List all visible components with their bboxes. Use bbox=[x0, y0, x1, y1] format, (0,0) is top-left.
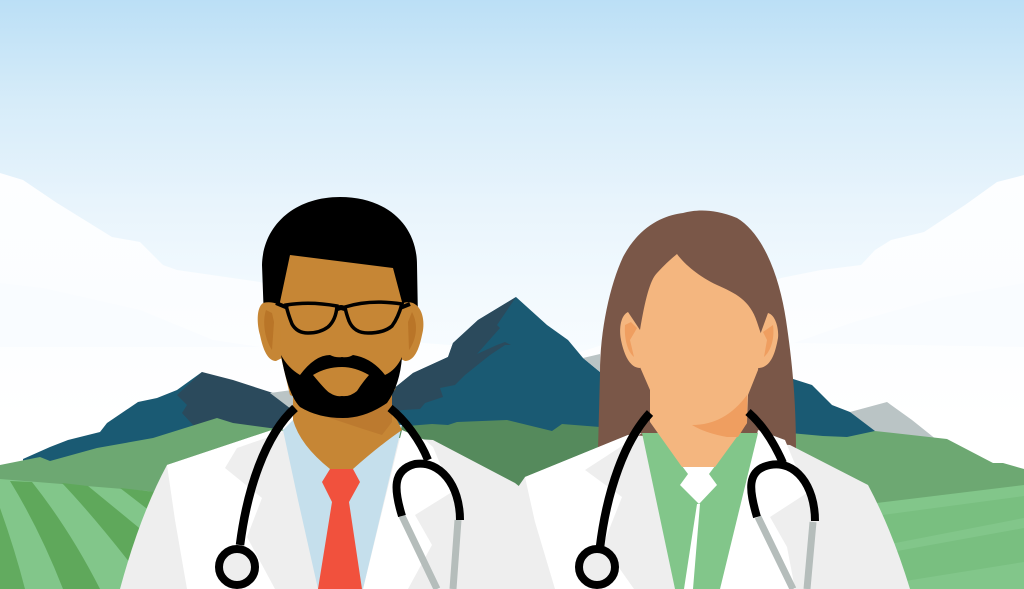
man glasses bbox=[276, 302, 410, 333]
right mountain bbox=[790, 378, 937, 440]
man face bbox=[280, 255, 402, 418]
sky bbox=[0, 0, 1024, 360]
man tie bbox=[318, 469, 362, 589]
doctor: man bbox=[120, 197, 580, 589]
doctor: woman bbox=[518, 211, 910, 589]
left green hill bbox=[0, 418, 300, 510]
left crop field bbox=[0, 479, 190, 589]
man coat bbox=[120, 430, 580, 589]
centre green hill bbox=[395, 420, 600, 500]
woman hair bbox=[598, 211, 796, 450]
right crop field bbox=[860, 485, 1024, 589]
woman ears bbox=[620, 312, 778, 368]
woman shirt bbox=[642, 433, 758, 589]
man hair bbox=[262, 197, 418, 320]
left mountain bbox=[23, 372, 295, 470]
centre mountain bbox=[392, 297, 600, 440]
background: clouds bbox=[0, 173, 1024, 589]
man neck shadow bbox=[327, 398, 392, 435]
woman stethoscope bbox=[579, 412, 815, 589]
woman collar and tie bbox=[680, 466, 717, 589]
man shirt bbox=[283, 420, 402, 589]
woman coat bbox=[518, 430, 910, 589]
woman face and neck bbox=[640, 254, 762, 467]
woman neck shadow bbox=[692, 395, 747, 437]
man neck bbox=[293, 395, 402, 469]
man beard bbox=[281, 355, 402, 418]
right green hill bbox=[790, 431, 1024, 510]
man stethoscope bbox=[219, 408, 460, 589]
man ears bbox=[258, 302, 423, 361]
